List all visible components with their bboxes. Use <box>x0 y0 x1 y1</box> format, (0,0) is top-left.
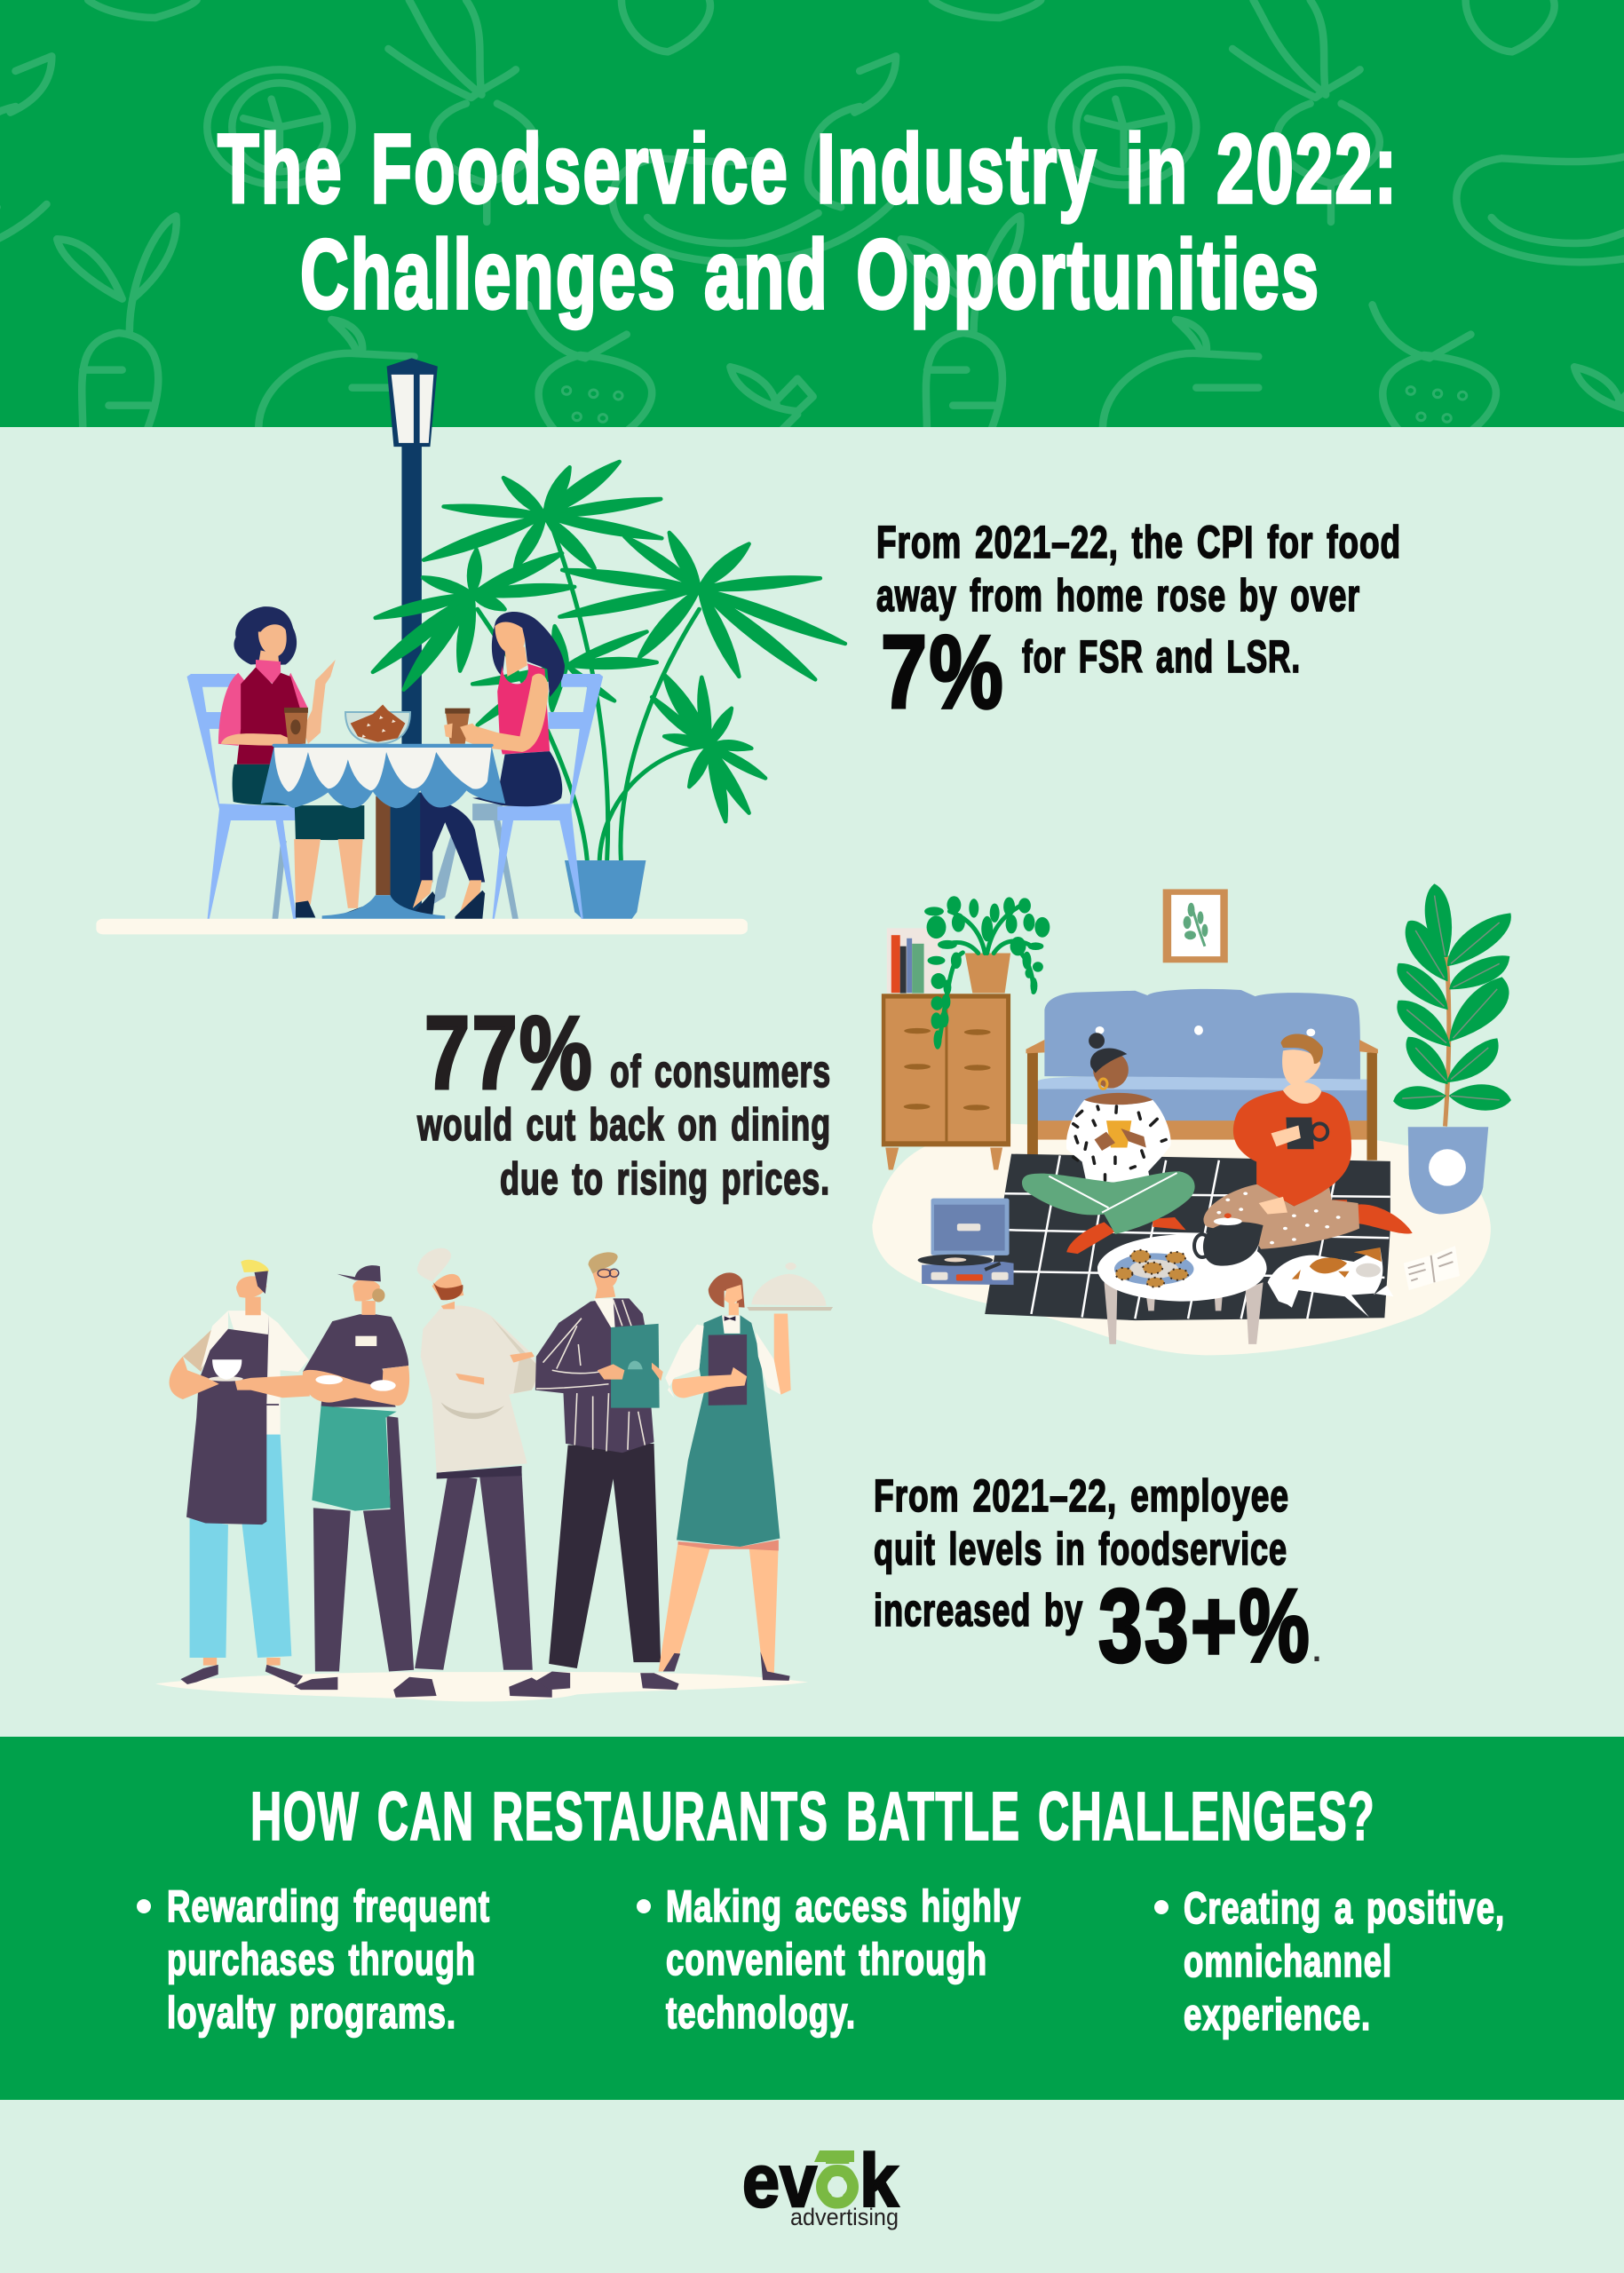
bullet: omnichannel experience: omnichannel <box>1184 1936 1392 1986</box>
record player <box>918 1199 1014 1285</box>
left chair <box>187 674 297 919</box>
sofa <box>1026 989 1378 1160</box>
logo: evok advertising: ō <box>816 2139 859 2222</box>
illustration: five foodservice employees <box>155 1248 833 1701</box>
trailing houseplant <box>924 896 1050 1049</box>
bullet: omnichannel experience <box>1154 1883 1505 2039</box>
background pattern of fruit and vegetables <box>0 0 1624 435</box>
bullet: convenient technology: technology. <box>666 1988 856 2038</box>
chef <box>415 1248 552 1698</box>
statistic: 7 percent CPI rise: away from home rose by over <box>876 570 1360 621</box>
potted palm <box>373 462 845 859</box>
bullet: convenient technology: Making access highly <box>666 1881 1021 1931</box>
bullet: convenient technology: convenient through <box>666 1935 987 1984</box>
right chair <box>432 674 603 919</box>
logo: evok advertising: advertising <box>790 2204 899 2230</box>
barista in apron <box>170 1260 310 1685</box>
logo: evok advertising <box>742 2139 899 2230</box>
statistic: 7 percent CPI rise: 7% <box>881 614 1005 730</box>
statistic: 77 percent of consumers: due to rising prices. <box>500 1153 830 1204</box>
statistic: employee quit levels up 33 percent: increased by <box>874 1585 1083 1635</box>
statistic: employee quit levels up 33 percent <box>874 1470 1321 1683</box>
maitre d' with menu <box>535 1252 679 1690</box>
statistic: employee quit levels up 33 percent: . <box>1312 1632 1321 1668</box>
statistic: 77 percent of consumers: 77% <box>424 994 594 1111</box>
floor blob <box>872 1124 1491 1355</box>
woman sitting cross-legged <box>1022 1033 1195 1254</box>
statistic: 77 percent of consumers <box>416 994 831 1204</box>
street lamp <box>387 358 438 912</box>
bullet: loyalty programs: purchases through <box>167 1935 476 1984</box>
plant pot <box>565 860 646 919</box>
statistic: employee quit levels up 33 percent: From 2021–22, employee <box>874 1470 1289 1521</box>
bullet: loyalty programs <box>137 1881 490 2038</box>
logo: evok advertising: ev <box>742 2139 817 2222</box>
illustration: couple relaxing at home <box>872 885 1509 1355</box>
statistic: 77 percent of consumers: of consumers <box>610 1046 831 1097</box>
bullet: loyalty programs: Rewarding frequent <box>167 1881 490 1931</box>
fiddle-leaf plant in pot <box>1395 885 1509 1214</box>
coffee table, cookies and teapot <box>1097 1213 1267 1344</box>
statistic: 7 percent CPI rise: From 2021–22, the CPI for food <box>876 517 1401 567</box>
open book <box>1404 1246 1460 1290</box>
woman on the left <box>218 606 364 917</box>
panel: how can restaurants battle challenges <box>0 1737 1624 2100</box>
bullet: omnichannel experience: experience. <box>1184 1990 1371 2039</box>
panel: header banner <box>0 0 1624 435</box>
logo: evok advertising: k <box>860 2139 899 2222</box>
statistic: 77 percent of consumers: would cut back on dining <box>416 1099 831 1150</box>
bullet: loyalty programs: loyalty programs. <box>167 1988 456 2038</box>
bowl of nuts <box>345 705 410 744</box>
checked rug <box>985 1154 1390 1320</box>
statistic: employee quit levels up 33 percent: 33+% <box>1098 1567 1311 1683</box>
man sitting with a mug <box>1203 1034 1413 1249</box>
framed picture <box>1163 889 1228 962</box>
ground shadow <box>155 1672 808 1701</box>
ground strip <box>96 919 748 934</box>
cabinet with books <box>882 928 1010 1169</box>
server in cap and green apron <box>294 1265 437 1698</box>
statistic: 7 percent CPI rise <box>876 517 1401 730</box>
table with scalloped tablecloth <box>261 744 505 919</box>
bullet: convenient technology <box>637 1881 1021 2038</box>
statistic: employee quit levels up 33 percent: quit levels in foodservice <box>874 1524 1287 1574</box>
statistic: 7 percent CPI rise: for FSR and LSR. <box>1022 631 1301 682</box>
woman on the right <box>413 612 565 919</box>
bullet: omnichannel experience: Creating a positive, <box>1184 1883 1505 1933</box>
title <box>218 115 1398 329</box>
waitress with cloche <box>659 1263 833 1681</box>
illustration: two women at an outdoor cafe table <box>96 358 845 934</box>
cat <box>1268 1247 1393 1318</box>
